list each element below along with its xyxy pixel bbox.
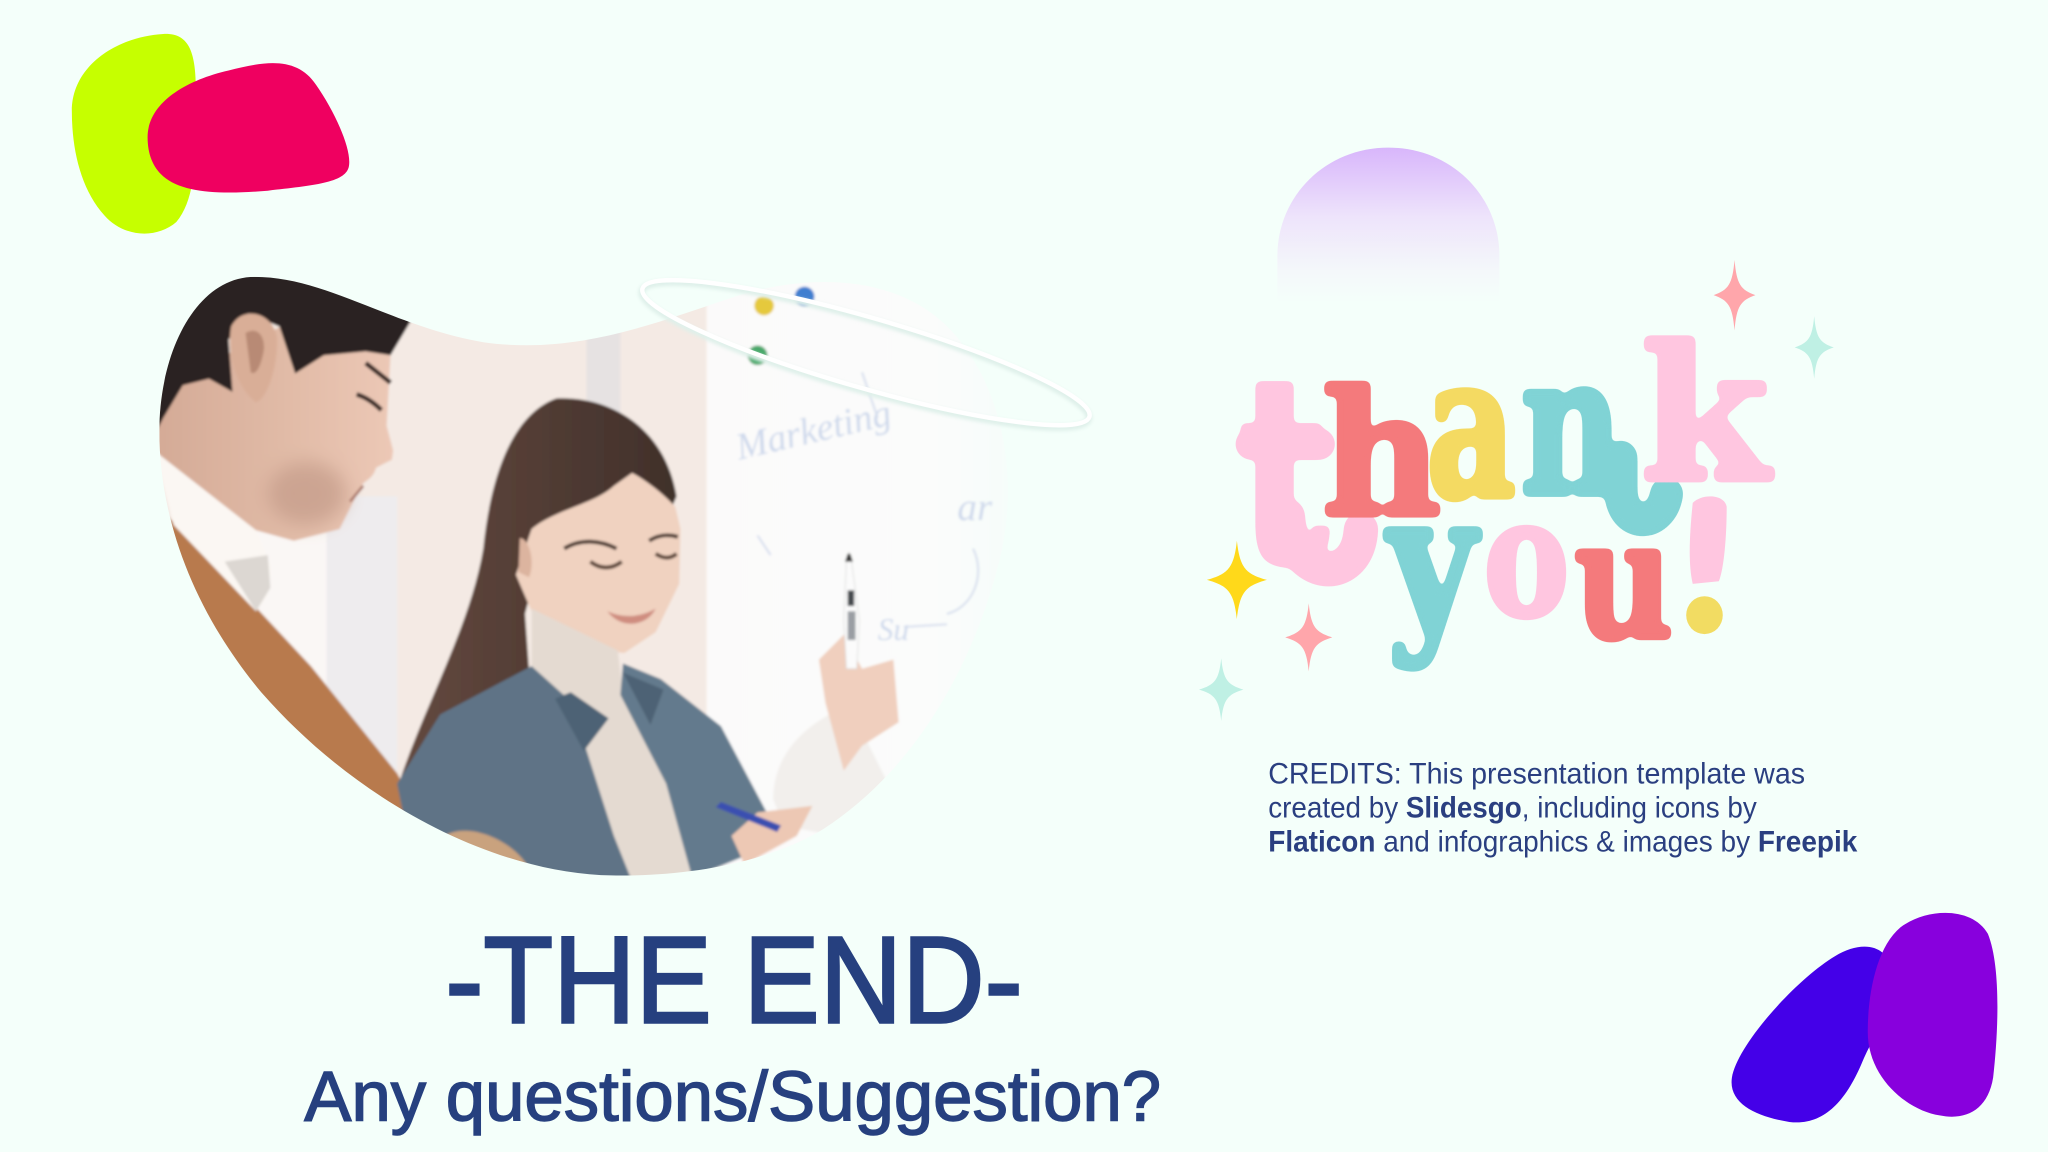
woman hair — [400, 398, 677, 781]
letter t: t — [1238, 317, 1329, 624]
man ear — [230, 314, 277, 402]
man eye and brow — [357, 363, 391, 410]
woman turtleneck and top — [532, 609, 692, 882]
letter h: h — [1322, 353, 1441, 556]
sparkle: mint top — [1795, 316, 1834, 379]
woman raised hand — [819, 635, 899, 771]
man face — [154, 327, 393, 541]
whiteboard handwriting: Marketing — [731, 392, 895, 469]
man jacket — [170, 516, 404, 811]
letter y: y — [1384, 451, 1481, 672]
photo whiteboard — [706, 284, 856, 866]
pen — [716, 802, 781, 832]
man hand blur — [446, 828, 528, 863]
title: -THE END- — [445, 912, 1023, 1050]
blob: purple bottom right — [1868, 913, 1997, 1117]
sparkle: pink bottom — [1285, 603, 1332, 671]
man stubble — [268, 462, 346, 525]
credits text — [1268, 758, 1858, 859]
letter n: n — [1520, 311, 1623, 541]
letter u: u — [1574, 482, 1674, 677]
letter o: o — [1484, 461, 1569, 654]
subtitle: Any questions/Suggestion? — [304, 1057, 1161, 1136]
magnets — [754, 296, 774, 315]
sparkles — [1199, 260, 1834, 721]
credits text: Flaticon and infographics & images by Freepik — [1268, 826, 1858, 859]
woman denim jacket — [397, 666, 635, 888]
whiteboard handwriting: Su — [878, 612, 909, 647]
man hair — [157, 268, 411, 431]
woman face — [516, 473, 680, 653]
woman lower hand — [731, 806, 812, 865]
blob: blue bottom right — [1732, 947, 1894, 1122]
photo: two colleagues at a whiteboard — [144, 261, 1020, 888]
letter k: k — [1640, 305, 1772, 523]
man collar — [160, 456, 257, 612]
whiteboard handwriting: ar — [957, 486, 993, 529]
whiteboard handwriting — [738, 407, 993, 641]
credits text: created by Slidesgo, including icons by — [1268, 792, 1757, 825]
orbit ring — [632, 255, 1099, 453]
photo wall — [164, 306, 707, 779]
blob: crimson top left — [148, 63, 349, 193]
decorative gradient dome — [1277, 148, 1499, 303]
thank you lettering — [1238, 305, 1772, 677]
exclamation mark — [1686, 496, 1727, 634]
credits text: CREDITS: This presentation template was — [1268, 758, 1805, 791]
marker pen — [844, 588, 858, 670]
sparkle: mint bottom — [1199, 658, 1243, 721]
letter a: a — [1426, 311, 1516, 544]
sparkle: yellow — [1207, 541, 1267, 619]
sparkle: pink top — [1714, 260, 1755, 330]
blob: lime top left — [72, 34, 196, 234]
